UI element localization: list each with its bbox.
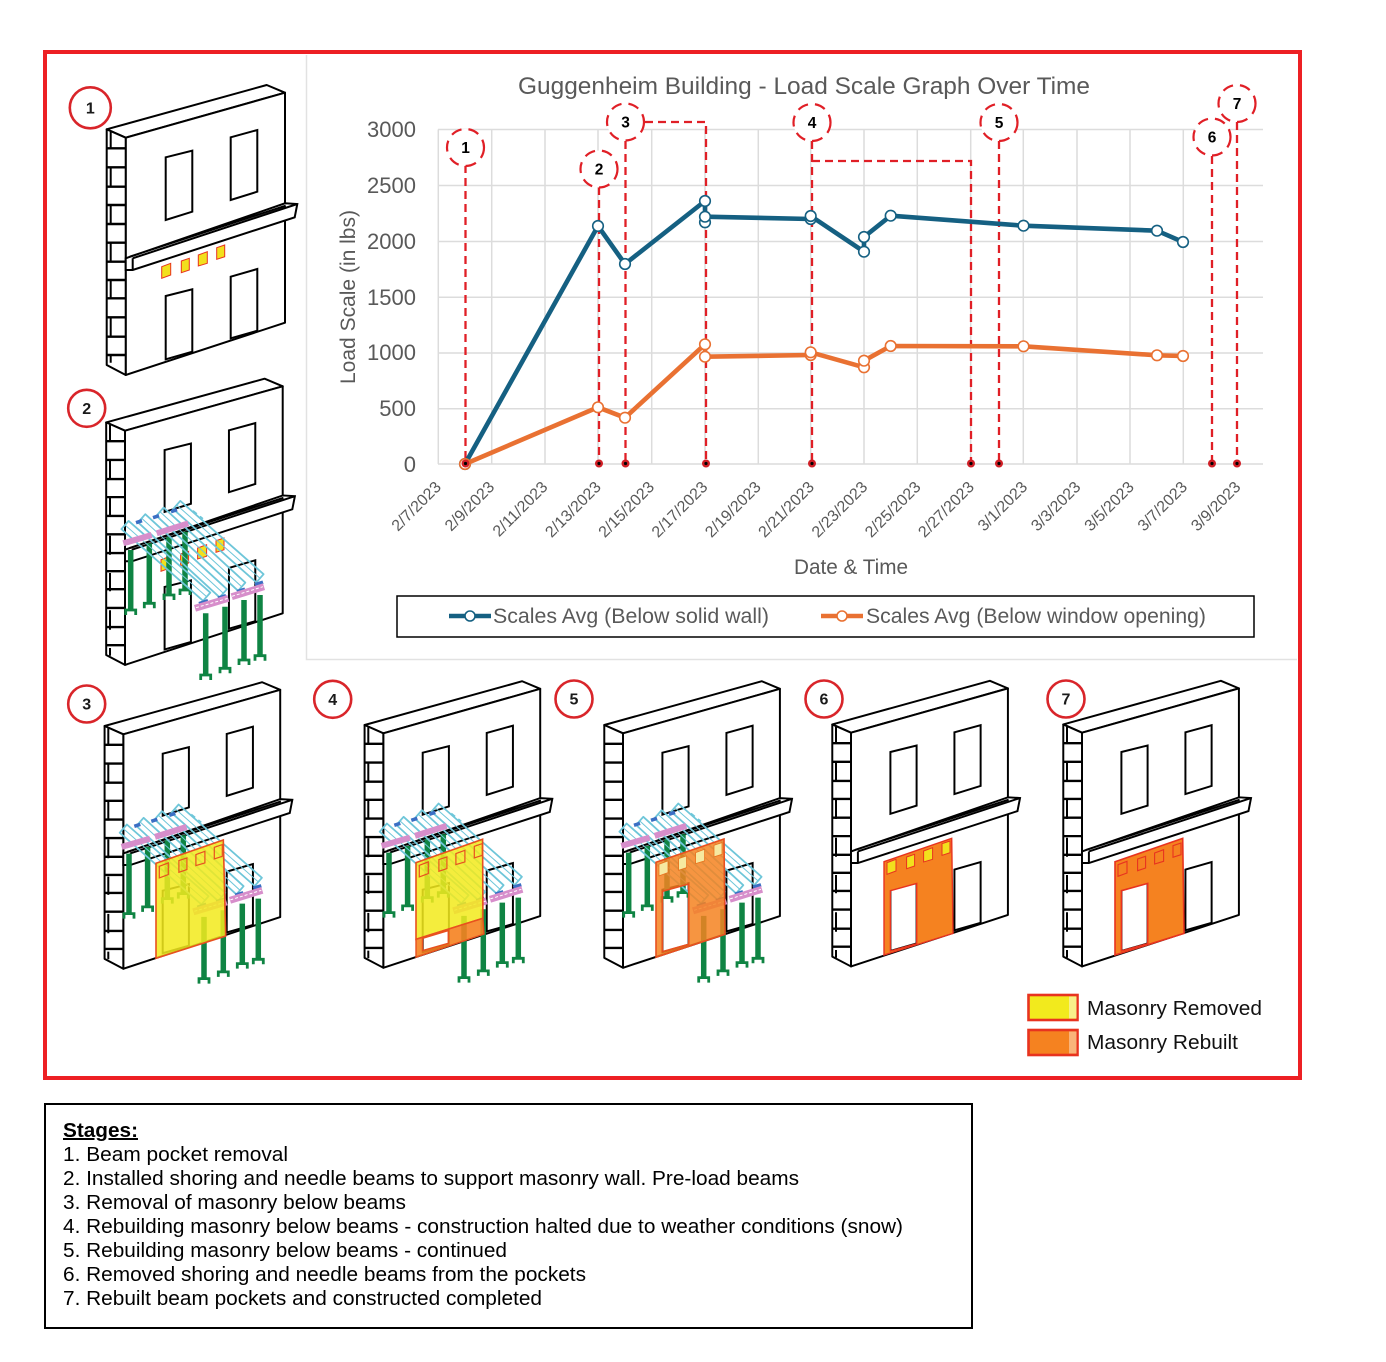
- y axis labels: 500: [379, 396, 416, 421]
- stage number badges: 5: [570, 692, 579, 709]
- stages text box: 3. Removal of masonry below beams: [63, 1192, 406, 1214]
- y axis labels: 1500: [367, 285, 416, 310]
- x axis labels: 3/5/2023: [1082, 479, 1138, 535]
- stage 1 wall drawing: [107, 85, 297, 375]
- stage number badges: 2: [82, 401, 91, 418]
- stage 6 wall drawing: [832, 681, 1020, 966]
- chart: load scale over time: [337, 85, 1263, 579]
- chart panel border: [306, 55, 1297, 660]
- stage 3 wall drawing: [105, 682, 292, 984]
- x axis labels: [389, 479, 1244, 541]
- stage 7 wall drawing: [1063, 681, 1251, 966]
- y axis title: Load Scale (in lbs): [337, 210, 360, 384]
- stage number badges: 4: [328, 692, 337, 709]
- stage number badges: 7: [1062, 692, 1071, 709]
- x axis labels: 2/21/2023: [756, 479, 818, 541]
- swatch: masonry rebuilt: [1028, 1030, 1078, 1055]
- x axis labels: 3/9/2023: [1188, 479, 1244, 535]
- masonry legend: [1028, 995, 1262, 1055]
- x axis labels: 2/9/2023: [442, 479, 498, 535]
- x axis labels: 2/23/2023: [809, 479, 871, 541]
- stages text box: [45, 1104, 972, 1328]
- x axis labels: 2/13/2023: [542, 479, 605, 541]
- stages text box: 7. Rebuilt beam pockets and constructed completed: [63, 1288, 542, 1310]
- stage 4 wall drawing: [365, 681, 552, 983]
- y axis labels: 3000: [367, 117, 416, 142]
- x axis labels: 3/1/2023: [975, 479, 1031, 535]
- x axis labels: 2/7/2023: [389, 479, 445, 535]
- x axis title: Date & Time: [794, 556, 908, 579]
- masonry legend: Masonry Removed: [1087, 998, 1262, 1020]
- stage number badges: [68, 87, 1084, 723]
- chart legend: Scales Avg (Below window opening): [866, 605, 1206, 628]
- stage marker dots: [462, 460, 1241, 468]
- chart title: Guggenheim Building - Load Scale Graph Over Time: [518, 73, 1090, 100]
- series: below solid wall: [460, 196, 1188, 469]
- main red frame: [45, 52, 1300, 1078]
- stage number badges: 6: [820, 692, 829, 709]
- y axis labels: 0: [404, 452, 416, 477]
- stages text box: 1. Beam pocket removal: [63, 1144, 288, 1166]
- stages text box: 6. Removed shoring and needle beams from the pockets: [63, 1264, 586, 1286]
- stage marker circles: 5: [995, 115, 1004, 132]
- stage number badges: 3: [82, 697, 91, 714]
- chart gridlines: [438, 130, 1263, 464]
- stage 2 wall drawing: [106, 379, 295, 680]
- stage marker circles: 1: [461, 140, 470, 157]
- stage marker circles: [447, 85, 1256, 188]
- stages text box: 4. Rebuilding masonry below beams - construction halted due to weather conditions (snow): [63, 1216, 903, 1238]
- x axis labels: 3/7/2023: [1135, 479, 1191, 535]
- chart legend: Scales Avg (Below solid wall): [493, 605, 769, 628]
- stage marker circles: 6: [1208, 130, 1217, 146]
- y axis labels: 1000: [367, 340, 416, 365]
- stage marker circles: 7: [1233, 96, 1241, 113]
- x axis labels: 3/3/2023: [1028, 479, 1085, 535]
- x axis labels: 2/27/2023: [915, 479, 978, 541]
- x axis labels: 2/11/2023: [490, 479, 551, 540]
- stage number badges: 1: [86, 100, 95, 118]
- stage marker lines: [466, 122, 1237, 464]
- x axis labels: 2/25/2023: [862, 479, 925, 541]
- masonry legend: Masonry Rebuilt: [1087, 1032, 1238, 1054]
- y axis labels: [367, 117, 416, 477]
- swatch: masonry removed: [1028, 995, 1078, 1020]
- series: below window opening: [460, 339, 1188, 469]
- y axis labels: 2500: [367, 173, 416, 198]
- chart legend: [397, 596, 1254, 637]
- stage 5 wall drawing: [604, 681, 792, 983]
- x axis labels: 2/17/2023: [649, 479, 711, 541]
- stage marker circles: 2: [595, 162, 603, 178]
- stages text box: 2. Installed shoring and needle beams to support masonry wall. Pre-load beams: [63, 1168, 799, 1190]
- stages text box: 5. Rebuilding masonry below beams - continued: [63, 1240, 507, 1262]
- stages text box: Stages:: [63, 1120, 138, 1142]
- stage marker circles: 3: [621, 114, 630, 132]
- y axis labels: 2000: [367, 229, 416, 254]
- stage marker circles: 4: [808, 115, 817, 132]
- x axis labels: 2/15/2023: [596, 479, 658, 541]
- x axis labels: 2/19/2023: [702, 479, 765, 541]
